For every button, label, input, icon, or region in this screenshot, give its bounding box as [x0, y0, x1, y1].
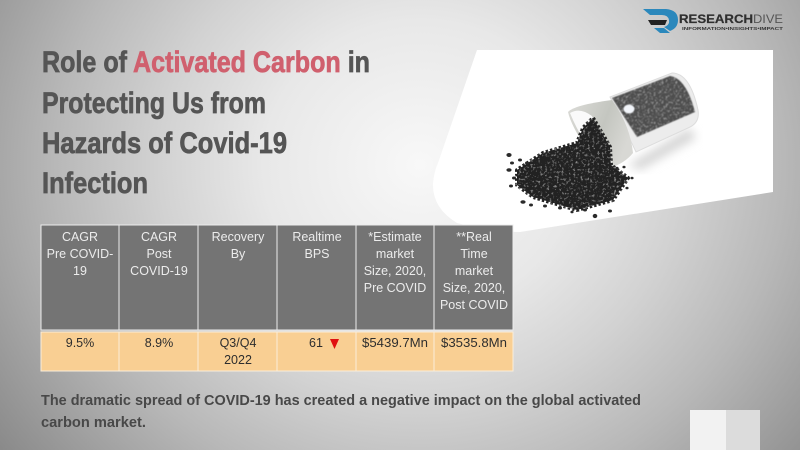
table header labels: *Estimate: [368, 230, 422, 244]
jar shadow: [628, 128, 696, 170]
jar carbon contents: [612, 76, 695, 137]
carbon pile: [517, 118, 628, 210]
photo: spilled activated carbon jar: [433, 50, 773, 232]
body text: The dramatic spread of COVID-19 has created a negative impact on the global activated: [41, 393, 641, 409]
table header labels: Time: [460, 247, 488, 261]
table header labels: market: [455, 264, 494, 278]
table header labels: COVID-19: [130, 264, 188, 278]
logo tagline: INFORMATION•INSIGHTS•IMPACT: [682, 26, 783, 31]
jar opening: [570, 111, 612, 167]
table header labels: [47, 230, 508, 312]
table values: [66, 336, 507, 367]
table header labels: Pre COVID-: [47, 247, 113, 261]
table header row: [41, 225, 513, 330]
decorative bottom squares: [690, 410, 760, 450]
table header labels: Size, 2020,: [443, 281, 505, 295]
title: Role of Activated Carbon in: [42, 46, 370, 79]
table value row: [41, 332, 513, 371]
table header labels: CAGR: [62, 230, 98, 244]
logo: Research Dive: DIVE: [753, 12, 783, 26]
table header labels: market: [376, 247, 415, 261]
photo white panel: [433, 50, 773, 232]
data table: [41, 225, 513, 371]
table header labels: 19: [73, 264, 87, 278]
table header labels: Realtime: [292, 230, 342, 244]
table values: $5439.7Mn: [362, 336, 428, 350]
body text: [41, 393, 641, 431]
table values: Q3/Q4: [220, 336, 256, 350]
table header labels: Post: [146, 247, 172, 261]
jar highlight: [624, 104, 634, 114]
table header labels: **Real: [456, 230, 492, 244]
jar body: [610, 73, 698, 152]
table header labels: Post COVID: [440, 298, 508, 312]
table header labels: Pre COVID: [364, 281, 426, 295]
body text: carbon market.: [41, 415, 146, 431]
table header labels: Recovery: [212, 230, 265, 244]
table header labels: Size, 2020,: [364, 264, 426, 278]
jar neck ring: [568, 100, 633, 168]
table values: 9.5%: [66, 336, 94, 350]
title: [42, 46, 370, 200]
table values: 8.9%: [145, 336, 173, 350]
logo wordmark: RESEARCH: [679, 12, 753, 26]
table header labels: BPS: [304, 247, 330, 261]
icon: red down triangle: [330, 339, 339, 349]
table values: 61: [309, 336, 323, 350]
table values: $3535.8Mn: [441, 336, 507, 350]
title: Infection: [42, 167, 148, 200]
table header labels: CAGR: [141, 230, 177, 244]
table header labels: By: [231, 247, 246, 261]
scattered carbon grains: [506, 153, 634, 218]
title: Hazards of Covid-19: [42, 127, 287, 160]
logo: Research Dive: [643, 9, 783, 33]
title: Protecting Us from: [42, 87, 266, 120]
table values: 2022: [224, 353, 252, 367]
icon: logo mark: [643, 9, 678, 33]
